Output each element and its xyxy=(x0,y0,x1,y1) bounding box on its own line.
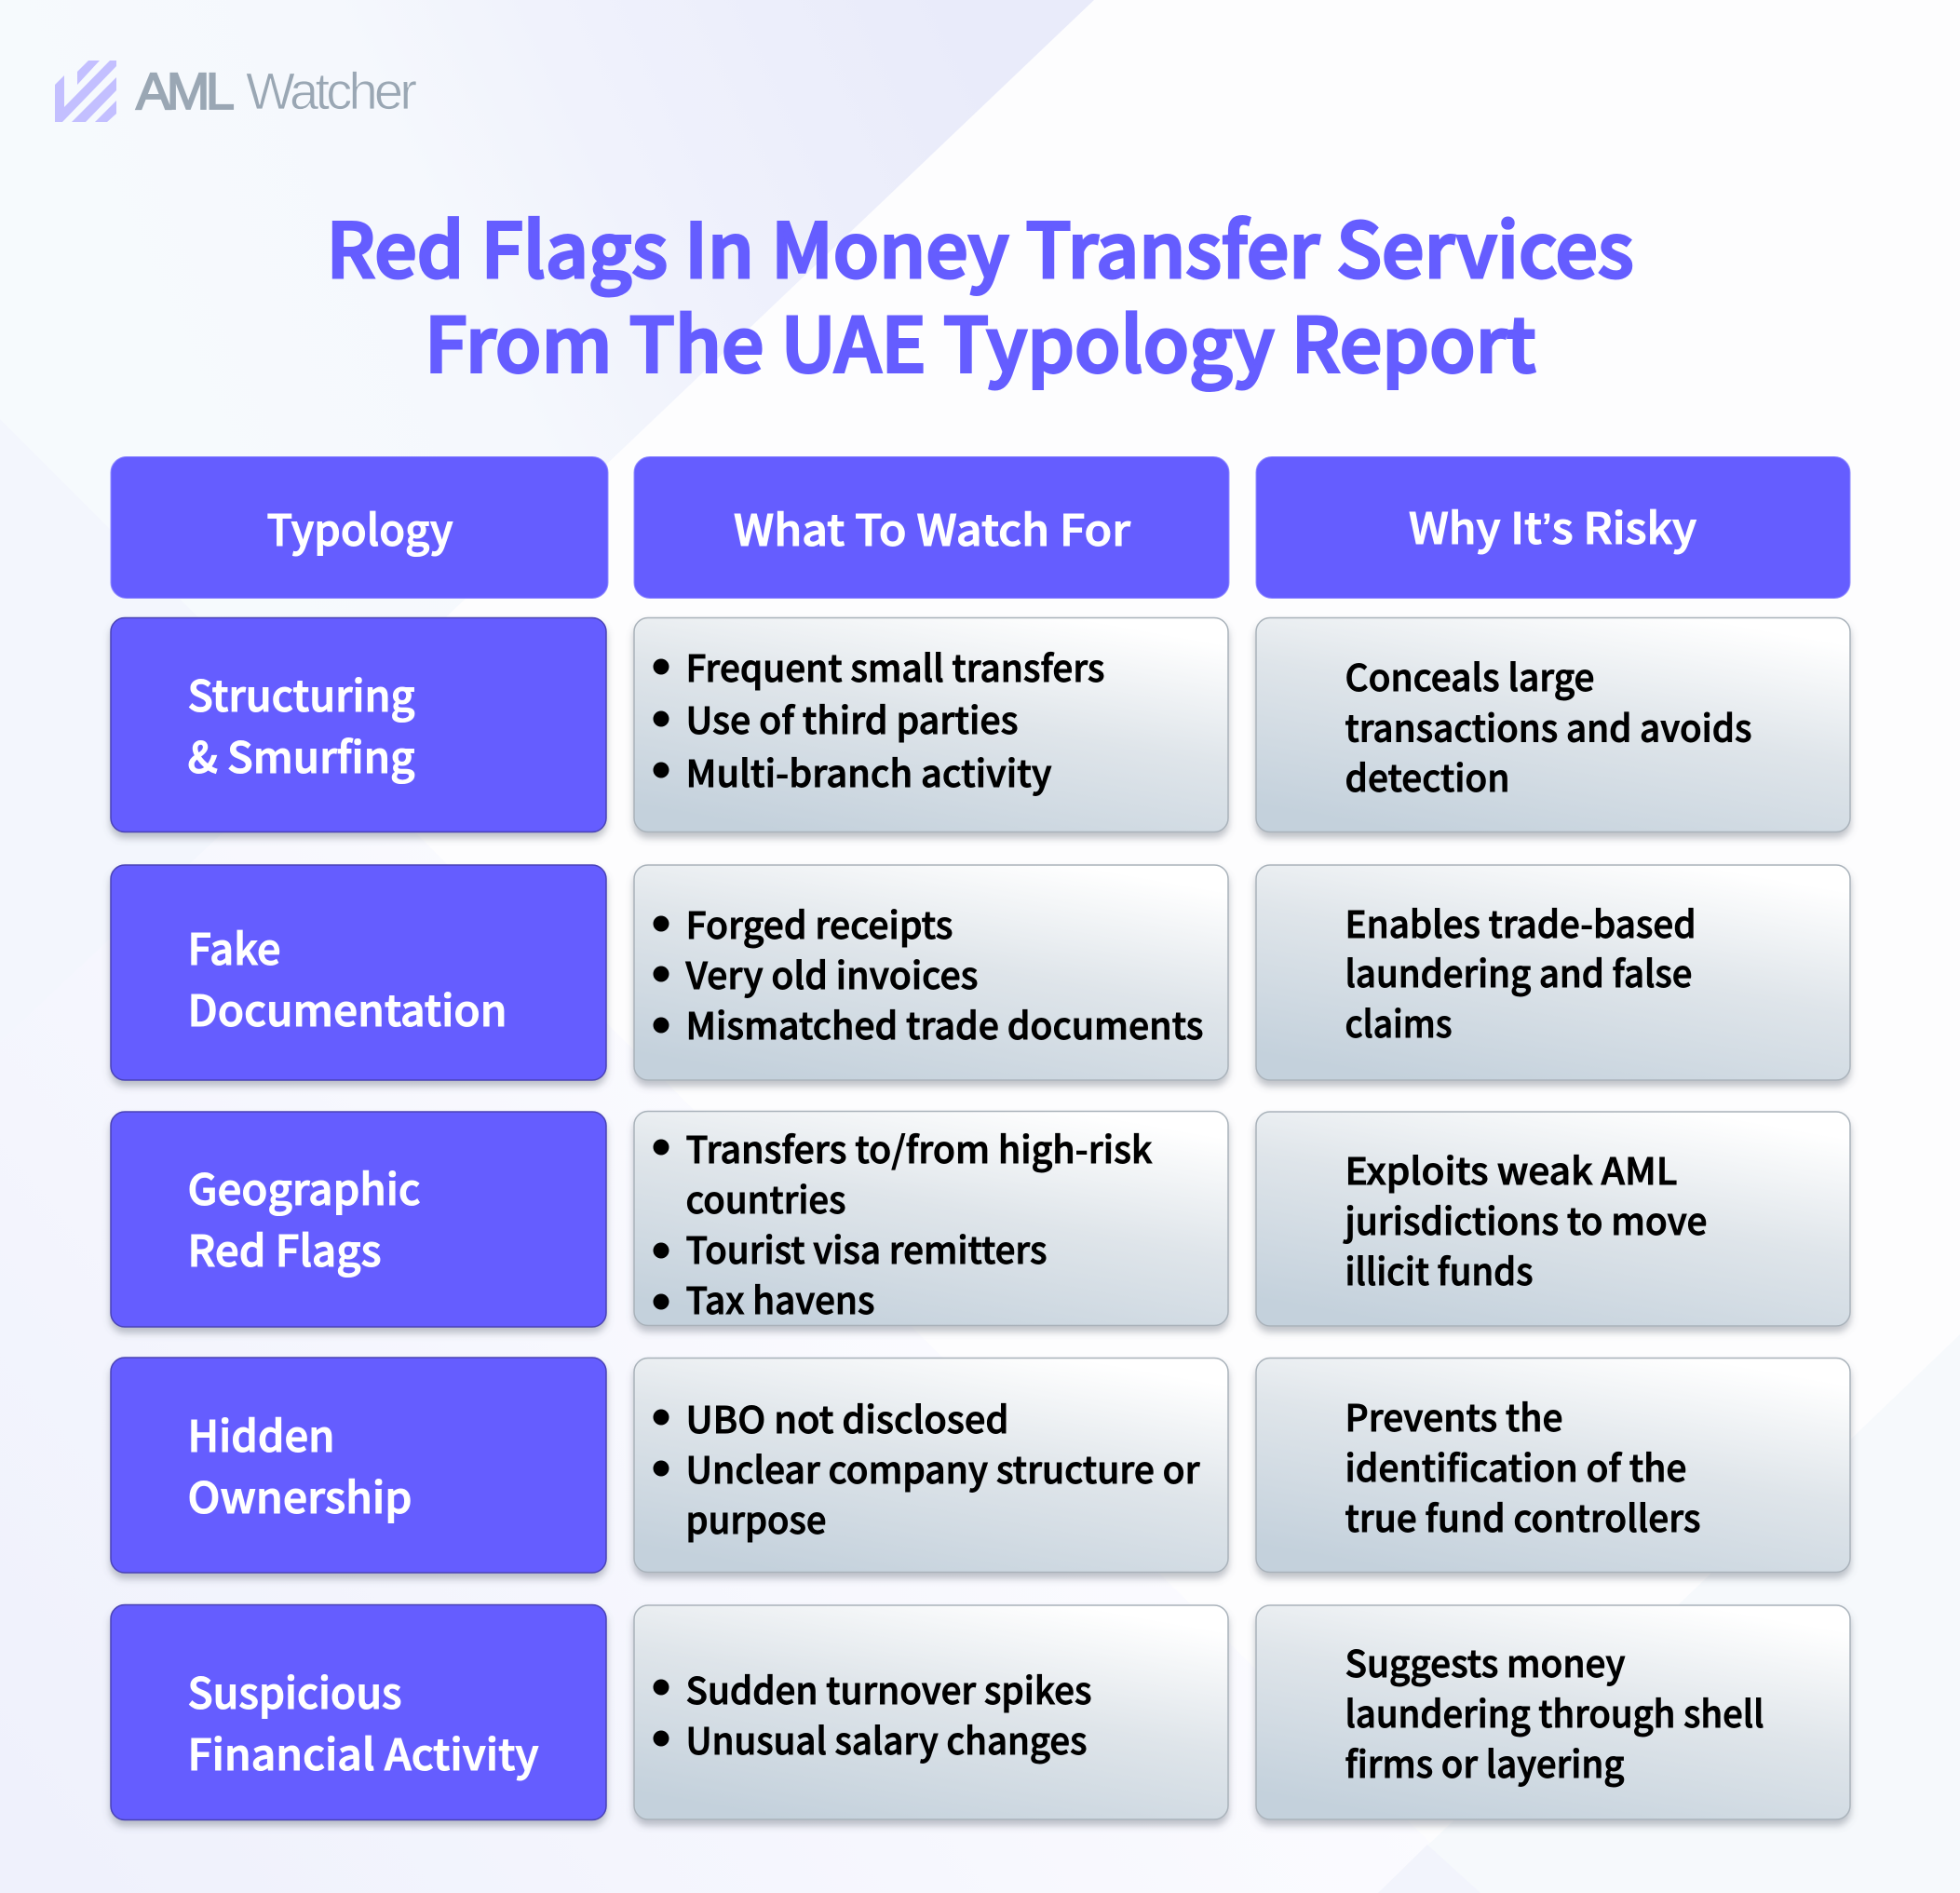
header: What To Watch For: What To Watch For xyxy=(734,497,1130,559)
row 2 what to watch for xyxy=(634,865,1228,1080)
header: What To Watch For xyxy=(634,456,1229,598)
row 2 typology: Fake Documentation: Documentation xyxy=(188,978,507,1039)
row 1 why it's risky: Conceals large xyxy=(1345,649,1594,702)
row 4 typology: Hidden Ownership: Ownership xyxy=(188,1465,412,1526)
logo: AML Watcher xyxy=(55,61,417,122)
row 2 typology: Fake Documentation: Fake xyxy=(188,916,281,978)
row 4 what to watch for: purpose xyxy=(685,1492,827,1545)
row 2 why it's risky: laundering and false xyxy=(1345,945,1693,998)
row 1 typology: Structuring & Smurfing xyxy=(111,618,606,832)
row 2 why it's risky: Enables trade-based xyxy=(1345,896,1696,949)
row 1 typology: Structuring & Smurfing: & Smurfing xyxy=(188,724,415,786)
header: Typology xyxy=(111,456,608,598)
row 5 typology: Suspicious Financial Activity xyxy=(111,1605,606,1819)
row 4 why it's risky xyxy=(1256,1358,1850,1572)
header: Why It's Risky xyxy=(1256,456,1850,598)
header: Typology: Typology xyxy=(266,497,453,559)
row 1 why it's risky: transactions and avoids xyxy=(1345,700,1752,752)
row 4 typology: Hidden Ownership: Hidden xyxy=(188,1403,335,1465)
row 1 what to watch for xyxy=(634,618,1228,832)
header: Why It's Risky: Why It’s Risky xyxy=(1409,495,1696,557)
row 2 why it's risky: claims xyxy=(1345,995,1453,1048)
row 3 why it's risky: jurisdictions to move xyxy=(1344,1193,1708,1246)
row 3 what to watch for: Tourist visa remitters xyxy=(685,1222,1047,1275)
row 4 typology: Hidden Ownership xyxy=(111,1358,606,1573)
row 1 what to watch for: Multi-branch activity xyxy=(685,745,1052,798)
row 3 typology: Geographic Red Flags: Red Flags xyxy=(188,1218,382,1279)
row 5 why it's risky: laundering through shell xyxy=(1345,1685,1764,1738)
row 5 why it's risky xyxy=(1256,1605,1850,1819)
row 2 why it's risky xyxy=(1256,865,1850,1080)
row 4 what to watch for: UBO not disclosed xyxy=(685,1391,1009,1444)
row 4 what to watch for xyxy=(634,1358,1228,1572)
row 1 what to watch for: Use of third parties xyxy=(685,692,1019,745)
row 3 what to watch for xyxy=(634,1112,1228,1326)
logo mark: striped chevron xyxy=(55,61,116,122)
row 5 what to watch for: Sudden turnover spikes xyxy=(685,1662,1091,1715)
row 3 why it's risky xyxy=(1256,1112,1850,1326)
row 2 what to watch for: Very old invoices xyxy=(685,947,978,1000)
logo wordmark: Watcher xyxy=(246,61,417,120)
logo wordmark xyxy=(136,61,417,120)
row 5 what to watch for xyxy=(634,1605,1228,1819)
row 1 why it's risky: detection xyxy=(1345,750,1510,803)
row 5 why it's risky: firms or layering xyxy=(1345,1736,1625,1789)
row 2 what to watch for: Forged receipts xyxy=(685,897,953,950)
row 5 what to watch for: Unusual salary changes xyxy=(685,1712,1088,1765)
row 1 typology: Structuring & Smurfing: Structuring xyxy=(188,663,415,724)
row 1 why it's risky xyxy=(1256,618,1850,832)
title xyxy=(326,191,1633,395)
title: Red Flags In Money Transfer Services xyxy=(326,191,1633,300)
row 5 typology: Suspicious Financial Activity: Suspicious xyxy=(188,1660,402,1722)
row 3 typology: Geographic Red Flags: Geographic xyxy=(188,1156,421,1218)
row 3 what to watch for: Tax havens xyxy=(685,1272,875,1325)
row 2 typology: Fake Documentation xyxy=(111,865,606,1080)
row 1 what to watch for: Frequent small transfers xyxy=(685,640,1104,693)
row 3 what to watch for: Transfers to/from high-risk xyxy=(685,1121,1153,1174)
logo wordmark: AML xyxy=(136,61,235,120)
row 4 why it's risky: identification of the xyxy=(1345,1440,1687,1493)
row 2 what to watch for: Mismatched trade documents xyxy=(685,997,1203,1050)
row 5 why it's risky: Suggests money xyxy=(1345,1635,1626,1688)
row 4 why it's risky: Prevents the xyxy=(1345,1389,1562,1442)
row 3 what to watch for: countries xyxy=(685,1171,845,1224)
row 3 why it's risky: illicit funds xyxy=(1345,1243,1533,1296)
row 5 typology: Suspicious Financial Activity: Financial Activity xyxy=(188,1722,538,1783)
row 4 what to watch for: Unclear company structure or xyxy=(685,1441,1200,1494)
row 4 why it's risky: true fund controllers xyxy=(1345,1490,1700,1543)
row 3 why it's risky: Exploits weak AML xyxy=(1345,1143,1678,1196)
row 3 typology: Geographic Red Flags xyxy=(111,1112,606,1327)
title: From The UAE Typology Report xyxy=(425,285,1536,395)
